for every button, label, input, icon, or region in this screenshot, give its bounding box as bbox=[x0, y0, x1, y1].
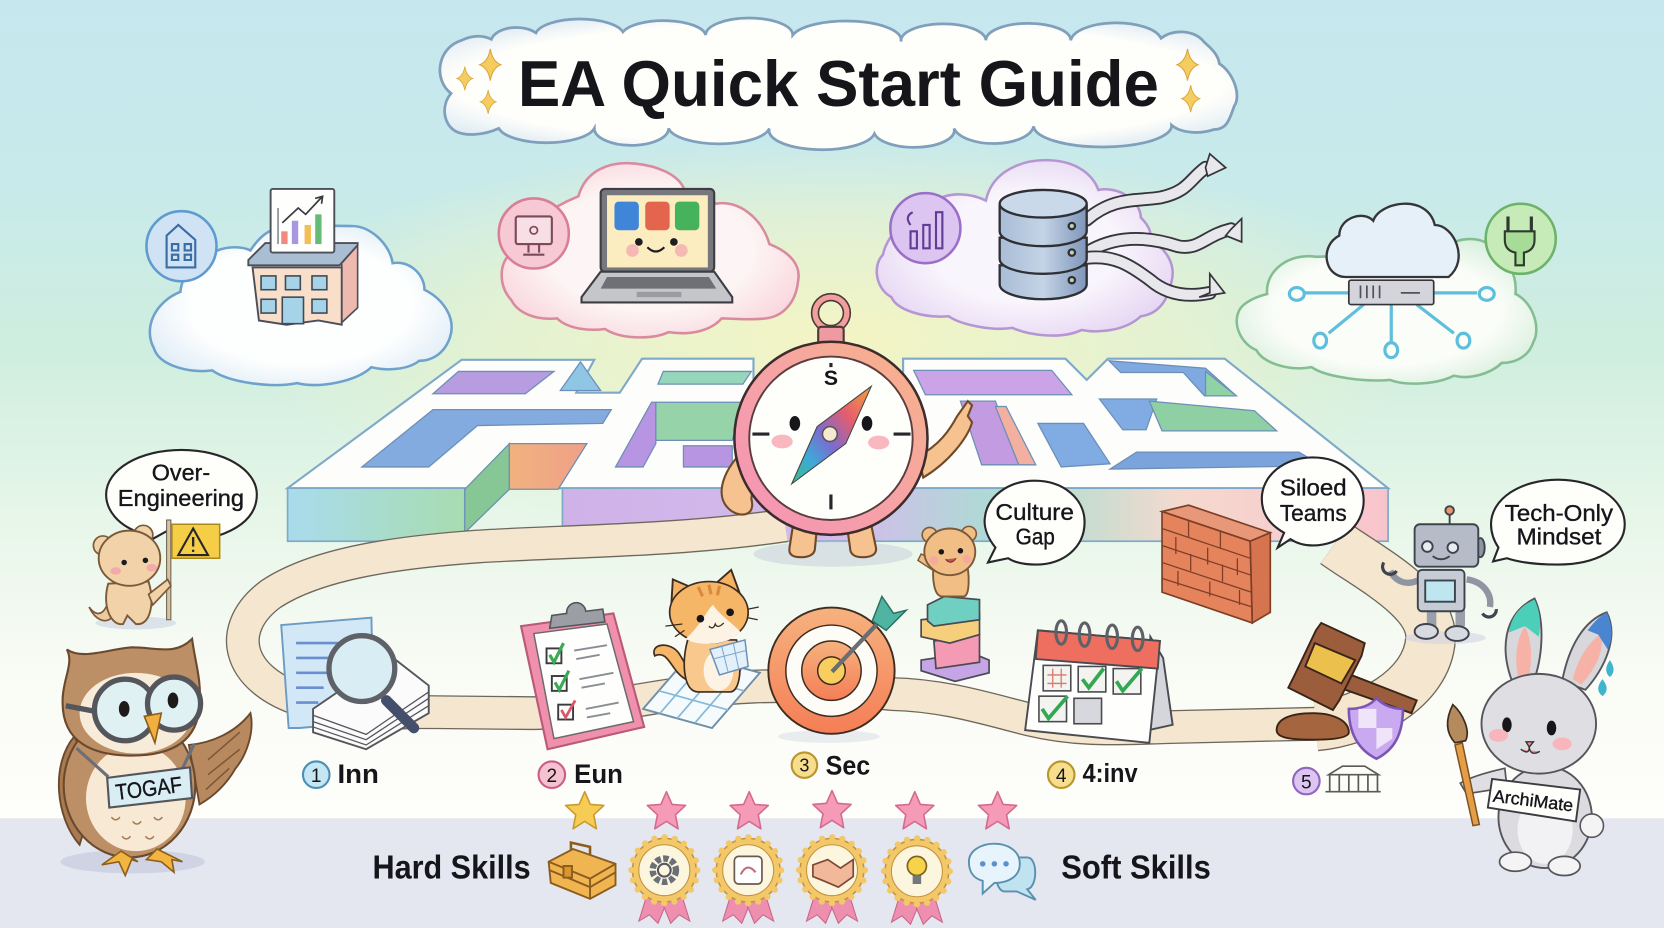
shield bbox=[1349, 698, 1403, 759]
hamster on blocks bbox=[918, 526, 976, 596]
robot shadow bbox=[1405, 631, 1486, 644]
cat with plan bbox=[643, 570, 760, 728]
magnifying glass bbox=[329, 636, 414, 728]
head bbox=[1481, 674, 1596, 774]
pitfall bubble: tech-only mindset bbox=[1491, 480, 1625, 565]
maze pits bbox=[362, 361, 1322, 533]
pitfall bubble: tech-only mindset: Mindset bbox=[1516, 523, 1602, 549]
feet bbox=[102, 849, 183, 876]
cat paper bbox=[710, 640, 748, 675]
compass body bbox=[734, 342, 928, 535]
robot body bbox=[1418, 570, 1464, 611]
lanyard bbox=[76, 744, 194, 777]
icon: speech bubbles bbox=[969, 844, 1036, 900]
tail bbox=[89, 607, 115, 621]
cat head bbox=[670, 582, 748, 643]
paintbrush bbox=[1447, 705, 1479, 826]
medal: light bulb bbox=[884, 838, 950, 924]
hard skills label: Hard Skills bbox=[372, 849, 531, 886]
icon: database bbox=[1000, 190, 1087, 299]
icon: cloud server bbox=[1327, 204, 1459, 305]
step 2: clipboard checklist bbox=[521, 603, 644, 749]
left arm bbox=[722, 451, 756, 515]
icon: temple bbox=[1325, 766, 1381, 792]
step 3 label bbox=[792, 751, 870, 781]
tail bbox=[654, 645, 690, 679]
maze front walls bbox=[288, 488, 1388, 541]
pitfall bubble: culture gap bbox=[985, 481, 1085, 565]
compass loop bbox=[815, 297, 847, 346]
robot head bbox=[1415, 524, 1478, 567]
face bbox=[1489, 717, 1572, 753]
feet bbox=[1500, 852, 1580, 876]
rabbit arm bbox=[1460, 768, 1507, 794]
title: EA Quick Start Guide bbox=[518, 47, 1159, 120]
step 5 label: 5 bbox=[1301, 772, 1312, 793]
cloud: data layer bbox=[877, 154, 1242, 336]
flag pole bbox=[167, 520, 171, 620]
ears bbox=[1506, 599, 1612, 690]
pitfall bubble: siloed teams bbox=[1262, 457, 1364, 548]
sound block bbox=[1277, 713, 1349, 740]
arrow bbox=[832, 596, 906, 672]
pitfall bubble: tech-only mindset: Tech-Only bbox=[1505, 500, 1613, 526]
step 4 label: 4:inv bbox=[1082, 760, 1138, 788]
robot right arm bbox=[1467, 579, 1490, 607]
body bbox=[106, 582, 151, 624]
gear icon bbox=[653, 859, 676, 882]
head bbox=[93, 525, 160, 586]
step 4: calendar bbox=[1025, 621, 1173, 743]
robot left arm bbox=[1390, 571, 1418, 583]
calendar cells bbox=[1039, 665, 1141, 724]
red grid cell mark bbox=[1047, 669, 1067, 688]
cat stripes bbox=[698, 585, 720, 596]
maze top surface bbox=[288, 359, 1388, 488]
pitfall bubble: culture gap: Culture bbox=[995, 499, 1074, 525]
glasses bbox=[66, 677, 201, 741]
icon: network connectors bbox=[1289, 288, 1494, 358]
compass shadow bbox=[753, 541, 913, 567]
compass face bbox=[749, 357, 913, 520]
icon: plug badge bbox=[1486, 204, 1556, 274]
icon: ribbon data flows bbox=[1087, 154, 1242, 297]
eyes bbox=[119, 692, 178, 717]
pitfall bubble: culture gap: Gap bbox=[1016, 523, 1055, 549]
gavel band bbox=[1305, 643, 1355, 683]
step 3 label: Sec bbox=[826, 751, 870, 781]
icon: building badge bbox=[146, 211, 216, 281]
pitfall bubble: over-engineering: Over- bbox=[152, 460, 210, 486]
blue document bbox=[281, 618, 374, 728]
skill stars bbox=[566, 791, 1017, 829]
icon: chart badge bbox=[890, 193, 960, 263]
owl mascot bbox=[59, 639, 252, 876]
hamster with warning flag bbox=[89, 520, 220, 629]
face details bbox=[772, 416, 889, 449]
flag bbox=[172, 524, 220, 558]
arm bbox=[149, 579, 171, 605]
stacked blocks bbox=[921, 596, 989, 681]
step 1 label bbox=[303, 759, 379, 789]
legs bbox=[789, 520, 876, 557]
shadow bbox=[60, 850, 205, 873]
robot feet bbox=[1415, 624, 1438, 639]
step 3 label: 3 bbox=[799, 756, 809, 776]
body bbox=[64, 713, 195, 857]
robot hands bbox=[1383, 562, 1496, 617]
ticks bbox=[752, 363, 911, 509]
cloud: technology layer bbox=[1237, 204, 1556, 384]
step 4 label: 4 bbox=[1056, 766, 1067, 787]
paint drips bbox=[1598, 660, 1614, 696]
winding path bbox=[243, 525, 1431, 728]
ArchiMate sign: ArchiMate bbox=[1492, 786, 1574, 815]
medal: handshake bbox=[799, 837, 865, 923]
soft skills label: Soft Skills bbox=[1061, 849, 1211, 886]
right wing bbox=[189, 713, 252, 804]
gavel head bbox=[1288, 623, 1365, 710]
cat ears bbox=[671, 570, 747, 616]
calendar checks bbox=[1042, 669, 1142, 718]
cloud: application layer bbox=[499, 163, 799, 337]
robot legs bbox=[1432, 609, 1460, 626]
pitfall bubble: siloed teams: Teams bbox=[1280, 500, 1347, 526]
maze bbox=[288, 359, 1388, 541]
head bbox=[63, 639, 200, 756]
step 2 label: Eun bbox=[574, 759, 623, 789]
icon: monitor badge bbox=[499, 198, 569, 268]
beak bbox=[144, 713, 161, 743]
title cloud bbox=[440, 18, 1237, 150]
needle bbox=[792, 386, 871, 484]
checklist bbox=[547, 643, 619, 720]
pitfall bubble: siloed teams: Siloed bbox=[1280, 475, 1347, 501]
step 5: gavel and shield bbox=[1277, 623, 1417, 759]
step 3: target with arrow bbox=[768, 596, 906, 743]
gavel handle bbox=[1339, 673, 1417, 713]
icon: smiling laptop bbox=[582, 189, 732, 302]
step 4 label bbox=[1048, 760, 1138, 788]
step 1 label: 1 bbox=[311, 766, 322, 787]
antenna bbox=[1449, 514, 1451, 524]
calendar rings bbox=[1056, 621, 1143, 651]
body bbox=[684, 640, 740, 692]
cat muzzle bbox=[686, 605, 741, 644]
medal: gear bbox=[631, 837, 697, 923]
north letter: S bbox=[824, 367, 838, 390]
cloud: business layer bbox=[146, 189, 452, 385]
pointing arm bbox=[918, 401, 972, 478]
warning icon bbox=[178, 528, 208, 555]
left wing bbox=[59, 736, 98, 845]
brick wall bbox=[1162, 505, 1270, 623]
robot ear bbox=[1476, 538, 1485, 557]
pitfall bubble: over-engineering: Engineering bbox=[118, 485, 244, 511]
step 2 label bbox=[539, 759, 623, 789]
step 1 label: Inn bbox=[337, 759, 379, 789]
icon: building with chart bbox=[248, 189, 358, 325]
grid mat bbox=[643, 654, 760, 728]
compass mascot bbox=[722, 297, 972, 567]
cat whiskers bbox=[665, 607, 759, 637]
face bbox=[80, 673, 192, 753]
step 5 label bbox=[1293, 766, 1381, 794]
icon: toolbox bbox=[549, 843, 616, 899]
body bbox=[1498, 766, 1592, 868]
belly bbox=[86, 745, 186, 851]
TOGAF badge: TOGAF bbox=[114, 772, 183, 805]
medal: framed sketch bbox=[715, 837, 781, 923]
robot bbox=[1383, 506, 1496, 644]
step 1: document review bbox=[281, 618, 429, 749]
rabbit with paintbrush bbox=[1447, 599, 1614, 876]
tail bbox=[1580, 814, 1604, 837]
ArchiMate sign bbox=[1488, 779, 1580, 821]
cat eyes bbox=[697, 609, 734, 623]
pitfall bubble: over-engineering bbox=[106, 450, 257, 541]
paper stack bbox=[313, 656, 429, 749]
sparkles bbox=[457, 49, 1200, 114]
shadow bbox=[96, 617, 176, 629]
step 2 label: 2 bbox=[547, 766, 557, 787]
